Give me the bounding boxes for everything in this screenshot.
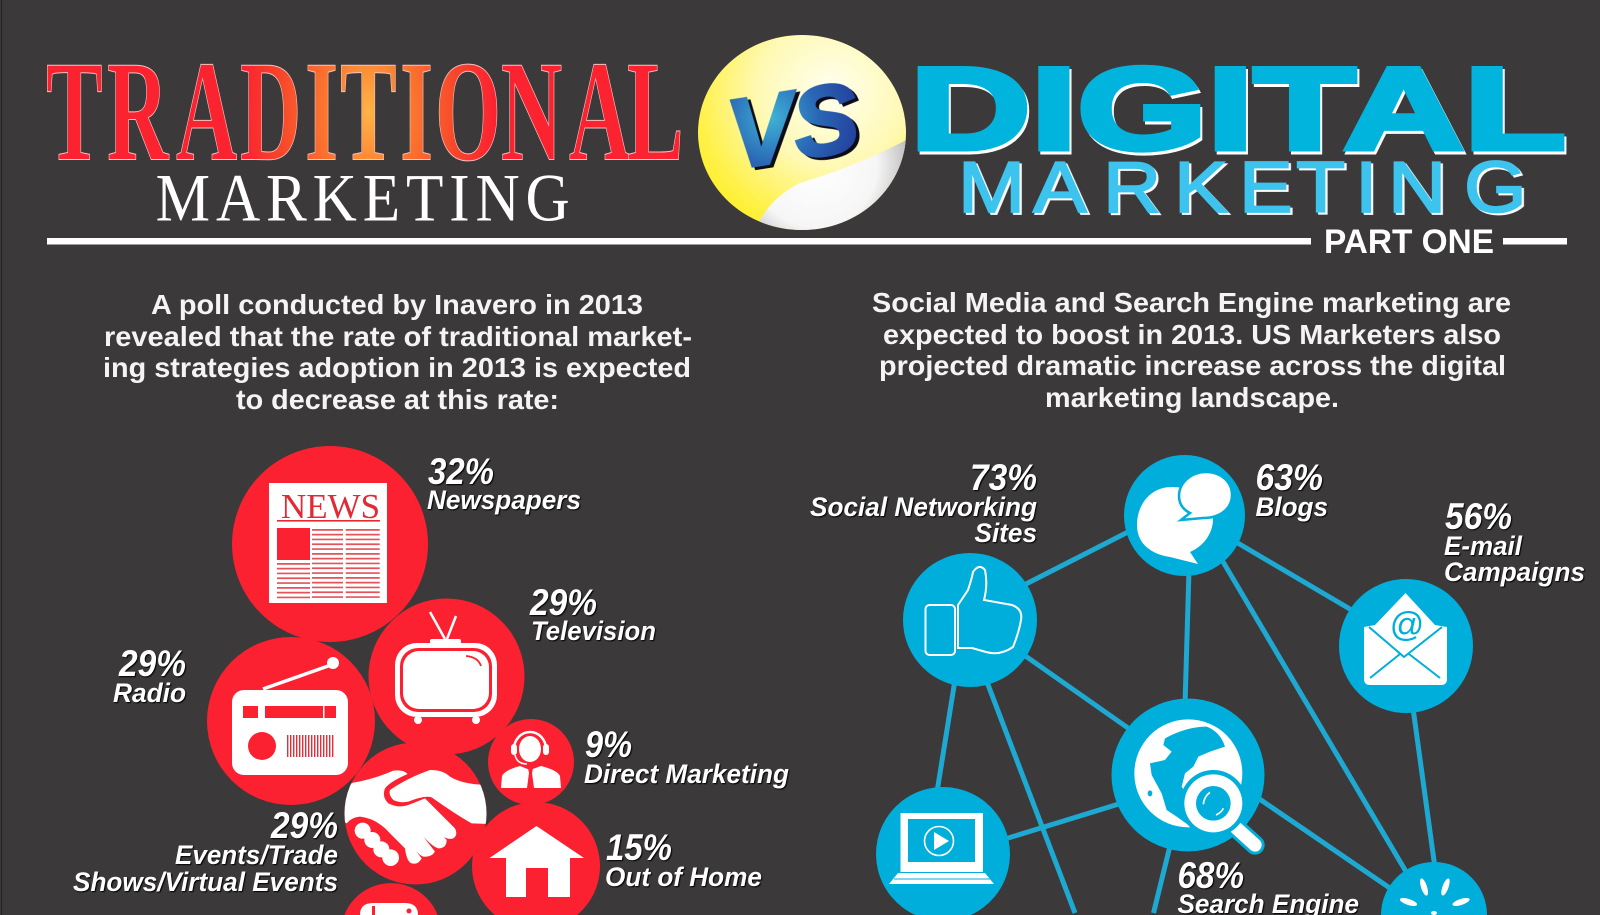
panel: digital labels — [810, 457, 1585, 915]
label: blogs — [1256, 457, 1328, 522]
label: e-mail campaigns: 56% — [1445, 496, 1512, 537]
intro text: digital: Social Media and Search Engine marketing are — [872, 287, 1511, 318]
label: social networking sites: Social Networking — [810, 492, 1037, 522]
label: e-mail campaigns: Campaigns — [1444, 557, 1585, 587]
label: radio: Radio — [113, 678, 186, 708]
label: events: Events/Trade — [175, 840, 338, 870]
label: television: 29% — [529, 582, 597, 623]
divider with Part One — [47, 223, 1567, 261]
label: e-mail campaigns: E-mail — [1444, 531, 1523, 561]
bubble: cut-off bottom icon — [344, 883, 438, 915]
label: blogs: Blogs — [1256, 492, 1328, 522]
label: out of home: 15% — [606, 827, 672, 868]
intro text: traditional: revealed that the rate of traditional market- — [104, 321, 692, 352]
panel: traditional marketing bubbles — [207, 446, 600, 915]
label: radio: 29% — [118, 643, 186, 684]
label: television — [529, 582, 656, 646]
sticker peel — [760, 140, 906, 230]
bubble: television — [368, 598, 524, 754]
label: television: Television — [531, 616, 656, 646]
node: cut-off bottom icon — [1381, 862, 1487, 915]
bubble: out of home — [472, 802, 600, 915]
VS sticker badge — [698, 35, 906, 230]
intro text: traditional — [103, 289, 692, 415]
label: newspapers: 32% — [428, 451, 494, 492]
heading: DIGITAL: DIGITAL — [910, 43, 1566, 174]
intro text: traditional: to decrease at this rate: — [236, 384, 559, 415]
bubble: events handshake — [340, 742, 490, 884]
label: events: Shows/Virtual Events — [73, 867, 338, 897]
label: social networking sites: 73% — [970, 457, 1037, 498]
title: Digital Marketing — [910, 43, 1566, 228]
subheading: MARKETING: MARKETING — [156, 160, 570, 235]
label: blogs: 63% — [1256, 457, 1323, 498]
node: social networking — [903, 553, 1037, 687]
panel: traditional labels — [73, 451, 789, 897]
network connectors — [937, 532, 1435, 913]
label: search engine: 68% — [1178, 855, 1244, 896]
label: social networking sites: Sites — [974, 518, 1037, 548]
intro text: digital: projected dramatic increase across the digital — [879, 350, 1506, 381]
label: search engine — [1178, 855, 1359, 915]
label: social networking sites — [810, 457, 1037, 548]
node: e-mail campaigns — [1339, 579, 1473, 713]
label: radio — [113, 643, 186, 708]
heading: TRADITIONAL: TRADITIONAL — [46, 32, 684, 191]
node: search engine — [1112, 698, 1264, 852]
intro text: traditional: A poll conducted by Inavero in 2013 — [151, 289, 643, 320]
bubble: radio — [207, 637, 375, 805]
node: blogs — [1124, 455, 1245, 576]
label: out of home — [605, 827, 762, 892]
intro text: digital: expected to boost in 2013. US Marketers also — [883, 319, 1501, 350]
intro text: traditional: ing strategies adoption in 2013 is expected — [103, 352, 691, 383]
label: events: 29% — [270, 805, 338, 846]
label: newspapers: Newspapers — [427, 485, 581, 515]
title: Traditional Marketing — [46, 32, 684, 235]
intro text: digital — [872, 287, 1511, 413]
label: events — [73, 805, 338, 897]
bubble: newspapers — [232, 446, 428, 642]
label: direct marketing — [584, 724, 789, 789]
node: video — [876, 787, 1010, 915]
bubble: newspapers: NEWS — [281, 487, 380, 526]
label: out of home: Out of Home — [605, 862, 762, 892]
label: direct marketing: 9% — [585, 724, 632, 765]
part one label: PART ONE — [1324, 223, 1494, 261]
subheading: MARKETING: MARKETING — [958, 148, 1527, 228]
node: e-mail campaigns: @ — [1390, 606, 1424, 644]
VS text: VS — [720, 61, 866, 190]
intro text: digital: marketing landscape. — [1045, 382, 1339, 413]
panel: digital marketing nodes — [876, 455, 1487, 915]
label: e-mail campaigns — [1444, 496, 1585, 587]
bubble: direct marketing — [488, 719, 574, 805]
label: direct marketing: Direct Marketing — [584, 759, 789, 789]
label: newspapers — [427, 451, 581, 515]
